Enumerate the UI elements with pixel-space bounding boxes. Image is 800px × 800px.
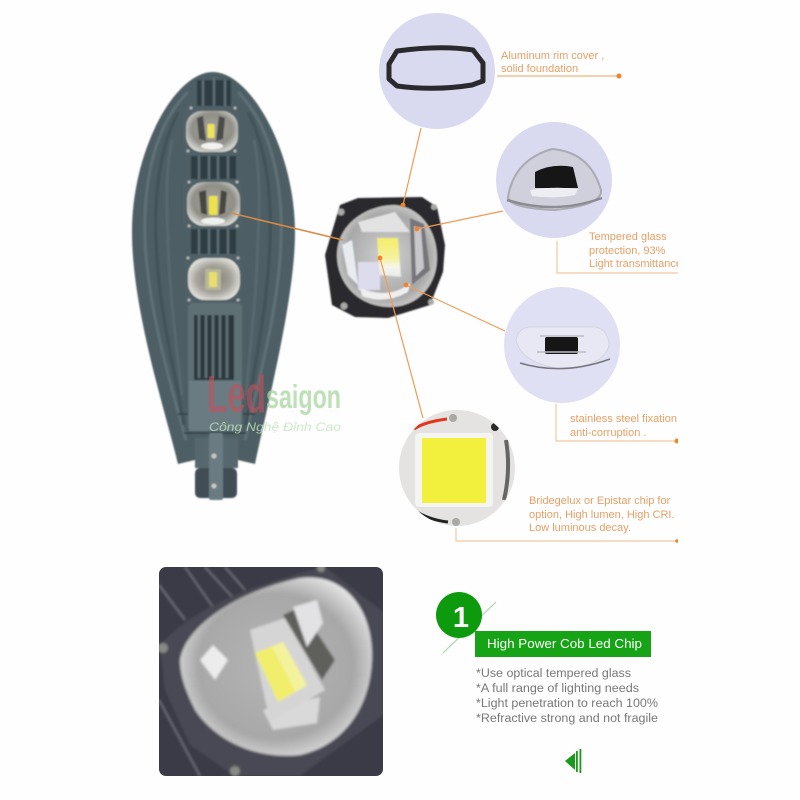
callout: aluminum rim: Aluminum rim cover , <box>501 50 604 62</box>
callout: tempered glass: protection, 93% <box>589 245 666 257</box>
lamp body <box>132 72 295 464</box>
badge number: 1 <box>453 602 469 634</box>
callout: stainless fixation <box>556 404 680 444</box>
chip <box>254 644 297 703</box>
street lamp <box>132 72 295 500</box>
connector dots <box>378 203 419 287</box>
lens 2 <box>183 179 242 229</box>
feature list: *Refractive strong and not fragile <box>476 713 658 725</box>
circle: tempered glass <box>496 122 612 238</box>
connector lines <box>231 128 505 418</box>
callout: tempered glass <box>557 231 682 273</box>
heading bar <box>475 631 651 657</box>
circle: aluminum rim <box>379 13 495 129</box>
part circles <box>379 13 620 526</box>
watermark tagline: Công Nghệ Đỉnh Cao <box>209 422 342 434</box>
heat sink ribs <box>145 92 281 440</box>
callout: cob chip: Low luminous decay. <box>529 522 631 534</box>
feature list: *Light penetration to reach 100% <box>476 698 658 710</box>
callout: stainless fixation: anti-corruption . <box>570 427 646 439</box>
circle: stainless fixation <box>504 287 620 403</box>
module frame <box>325 197 445 318</box>
lens glass <box>180 577 372 756</box>
circle: cob chip <box>399 410 515 526</box>
callout: cob chip <box>456 495 680 543</box>
callout: stainless fixation: stainless steel fixation <box>570 413 677 425</box>
callout: cob chip: option, High lumen, High CRI. <box>529 509 675 521</box>
badge divider <box>443 602 496 653</box>
module lens <box>337 205 437 307</box>
callout: cob chip: Bridegelux or Epistar chip for <box>529 495 671 507</box>
lens 1 <box>183 106 239 156</box>
callout: tempered glass: Tempered glass <box>589 231 667 243</box>
heading bar: High Power Cob Led Chip <box>487 636 642 651</box>
feature list: *A full range of lighting needs <box>476 683 639 695</box>
driver housing <box>178 303 255 433</box>
lens 3 <box>185 254 242 304</box>
watermark saigon: saigon <box>266 378 341 415</box>
watermark Led: Led <box>207 366 266 424</box>
icon: back arrow <box>565 749 581 773</box>
photo: lens close-up <box>155 563 387 780</box>
center lens module <box>325 197 445 318</box>
number badge <box>436 592 496 653</box>
callout: aluminum rim <box>497 50 622 78</box>
callouts <box>456 50 682 543</box>
pole mount <box>195 433 238 500</box>
watermark <box>207 366 342 434</box>
callout: tempered glass: Light transmittance <box>589 258 682 270</box>
feature list: *Use optical tempered glass <box>476 668 631 680</box>
frame screws <box>338 204 437 310</box>
lens frame <box>160 567 383 776</box>
center column <box>191 80 236 260</box>
module chip <box>377 238 401 277</box>
callout: aluminum rim: solid foundation <box>501 63 578 75</box>
badge circle <box>436 592 482 638</box>
feature list <box>476 668 658 725</box>
